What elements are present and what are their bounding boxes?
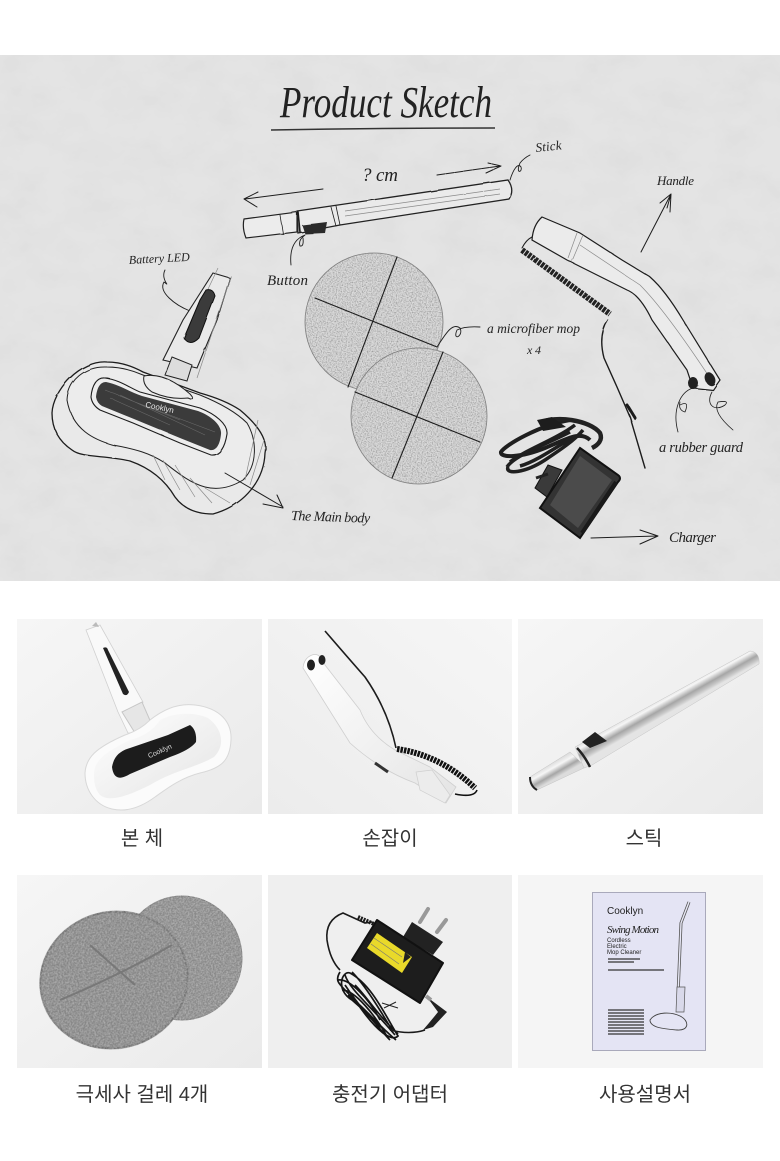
label: Stick: Stick (535, 137, 562, 155)
label: a rubber guard (659, 388, 744, 456)
caption: 손잡이: 손잡이 (362, 827, 418, 850)
panel: charger photo (268, 875, 512, 1068)
label: Button (267, 235, 308, 289)
photo: user manual: Mop Cleaner (607, 950, 641, 956)
label: a rubber guard: a rubber guard (659, 440, 744, 456)
panel: product sketch (0, 55, 780, 581)
label: microfiber mop x4: a microfiber mop (487, 321, 580, 336)
caption: 스틱: 스틱 (626, 827, 662, 850)
label: Battery LED (128, 250, 190, 311)
photo: user manual: Cordless (607, 938, 631, 944)
photo: user manual: Cooklyn (607, 906, 643, 917)
panel: stick photo (518, 619, 763, 814)
photo: charger adapter (327, 909, 447, 1040)
caption: 극세사 걸레 4개: 극세사 걸레 4개 (76, 1083, 208, 1106)
handle sketch (522, 217, 720, 468)
caption: 충전기 어댑터: 충전기 어댑터 (332, 1083, 448, 1106)
label: Stick (510, 137, 562, 180)
label: microfiber mop x4 (437, 321, 580, 357)
label: Handle: Handle (656, 173, 694, 188)
label: The Main body (225, 473, 371, 527)
caption: 사용설명서: 사용설명서 (599, 1083, 691, 1106)
arrow: stick length right (437, 163, 501, 175)
microfiber mop sketches (305, 253, 487, 484)
panel: main body photo (17, 619, 262, 814)
label: Charger (591, 530, 716, 546)
main body sketch (52, 268, 266, 514)
panel: handle photo (268, 619, 512, 814)
photo: handle (303, 631, 477, 803)
arrow: stick length left (244, 189, 323, 207)
main body sketch: Cooklyn (145, 400, 175, 415)
photo: main body (85, 622, 231, 810)
label: Charger: Charger (669, 530, 716, 546)
charger sketch (501, 417, 620, 538)
label: microfiber mop x4: x4 (526, 343, 541, 357)
label: The Main body: The Main body (291, 509, 371, 527)
photo: user manual: Electric (607, 944, 627, 950)
photo: main body: Cooklyn (147, 743, 173, 760)
label: Battery LED: Battery LED (128, 250, 190, 267)
caption: 본체: 본 체 (121, 827, 163, 850)
stick sketch (243, 180, 512, 238)
photo: stick (530, 651, 759, 790)
label: Button: Button (267, 273, 308, 289)
photo: user manual: Swing Motion (607, 924, 660, 936)
photo: user manual (592, 892, 706, 1050)
label: ?cm: ? cm (362, 165, 398, 186)
panel: manual photo (518, 875, 763, 1068)
title: Product Sketch: Product Sketch (279, 78, 492, 127)
panel: mop photo (17, 875, 262, 1068)
label: Handle (641, 173, 694, 252)
photo: microfiber mops (25, 895, 242, 1065)
